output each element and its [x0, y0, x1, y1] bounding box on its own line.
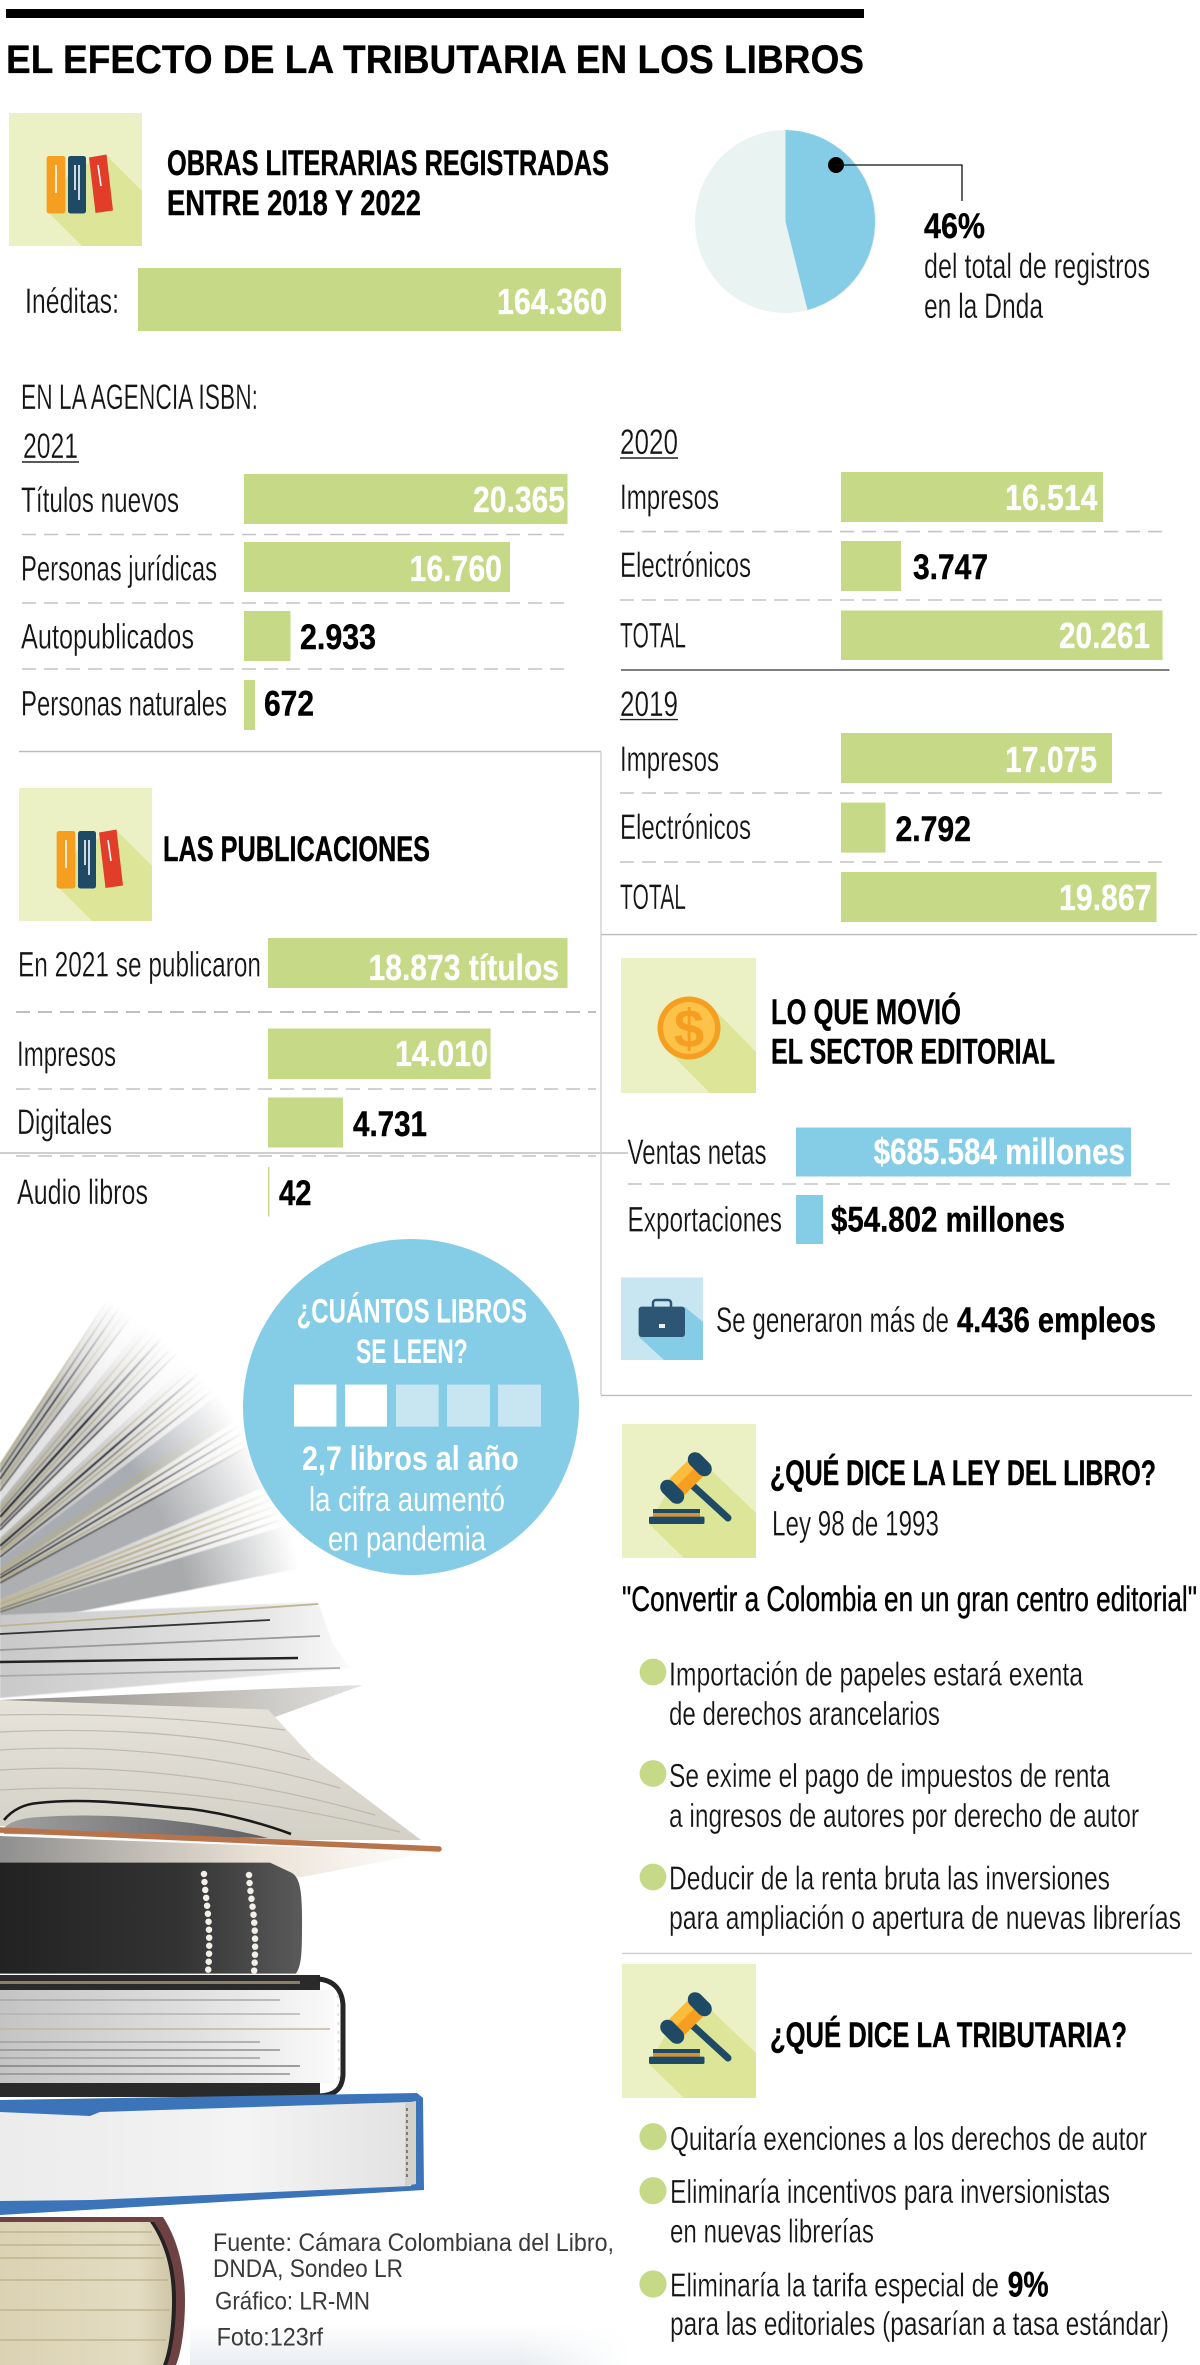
year 2019: 2019 [620, 685, 678, 724]
row: total 2019 [620, 872, 1156, 922]
source credits: Gráfico: LR-MN [215, 2288, 370, 2316]
panel: qué dice la ley del libro [622, 1424, 1197, 1936]
bullet: tarifa especial: Eliminaría la tarifa especial de [670, 2267, 999, 2304]
bullet: incentivos: en nuevas librerías [670, 2213, 874, 2250]
row: electrónicos 2020: 3.747 [913, 548, 988, 587]
row: ventas netas: $685.584 millones [874, 1131, 1125, 1172]
bullet: importación de papeles [640, 1656, 1083, 1732]
row: audio libros [17, 1167, 312, 1216]
row: digitales [17, 1098, 427, 1148]
heading: obras literarias [167, 144, 609, 223]
bullet: impuestos de renta [640, 1757, 1139, 1834]
panel: 2019 [620, 685, 1166, 922]
callout: cuántos libros se leen: 2,7 libros al año [302, 1440, 519, 1478]
callout: cuántos libros se leen: ¿CUÁNTOS LIBROS [297, 1292, 527, 1330]
icon: books [19, 788, 152, 921]
bullet: tarifa especial: 9% [1008, 2266, 1049, 2305]
row: personas jurídicas: Personas jurídicas [21, 550, 217, 588]
heading: las publicaciones: LAS PUBLICACIONES [163, 830, 430, 869]
icon: books [9, 113, 142, 246]
source credits: Foto:123rf [217, 2324, 323, 2352]
row: impresos: Impresos [17, 1035, 116, 1074]
row: electrónicos 2020 [620, 541, 988, 591]
row: títulos nuevos: 20.365 [473, 479, 565, 520]
row: audio libros: Audio libros [17, 1173, 148, 1212]
title: EL EFECTO DE LA TRIBUTARIA EN LOS LIBROS [6, 38, 864, 82]
row: impresos 2020: Impresos [620, 478, 719, 517]
row: electrónicos 2019: Electrónicos [620, 808, 751, 847]
row: exportaciones: $54.802 millones [831, 1201, 1065, 1240]
photo: stack of books [0, 1290, 630, 2365]
row: total 2020: 20.261 [1059, 615, 1150, 656]
pictogram: five squares [294, 1385, 541, 1427]
source credits: Fuente: Cámara Colombiana del Libro, [213, 2229, 614, 2257]
bullet: incentivos [639, 2173, 1110, 2250]
source credits: DNDA, Sondeo LR [213, 2255, 403, 2283]
year 2020: 2020 [620, 423, 678, 462]
label: inéditas: Inéditas: [25, 282, 119, 321]
callout: cuántos libros se leen: en pandemia [328, 1521, 486, 1559]
row: total 2020 [620, 610, 1163, 660]
row: total 2019: TOTAL [620, 878, 686, 917]
heading: lo que movió: EL SECTOR EDITORIAL [771, 1033, 1055, 1072]
row: electrónicos 2019 [620, 803, 971, 853]
row: exportaciones: Exportaciones [628, 1201, 782, 1240]
row: en 2021 se publicaron: 18.873 títulos [368, 947, 559, 988]
row: impresos 2019 [620, 733, 1112, 783]
row: autopublicados: 2.933 [300, 618, 376, 657]
callout: cuántos libros se leen: SE LEEN? [356, 1333, 468, 1371]
callout: 46% del total [924, 207, 1150, 326]
callout: 46% del total: 46% [924, 207, 985, 246]
row: ventas netas: Ventas netas [628, 1133, 766, 1172]
heading: en la agencia ISBN: EN LA AGENCIA ISBN: [21, 378, 258, 417]
heading: lo que movió [771, 992, 1055, 1072]
panel: obras literarias registradas [9, 113, 621, 331]
row: audio libros: 42 [279, 1174, 312, 1213]
source credits [213, 2229, 614, 2352]
callout: 46% del total: en la Dnda [924, 287, 1043, 326]
pie chart: 46% [695, 130, 962, 313]
row: digitales: Digitales [17, 1103, 112, 1142]
row: ventas netas [628, 1128, 1131, 1176]
row: impresos: 14.010 [395, 1033, 488, 1074]
row: impresos [17, 1028, 491, 1079]
icon: gavel [622, 1964, 756, 2098]
bullet: deducir de la renta [640, 1860, 1181, 1936]
row: electrónicos 2019: 2.792 [896, 810, 971, 849]
heading: obras literarias: OBRAS LITERARIAS REGISTRADAS [167, 144, 609, 183]
subheading: ley 98: Ley 98 de 1993 [772, 1504, 939, 1544]
panel: 2020 [620, 423, 1166, 660]
year 2021: 2021 [23, 427, 78, 466]
row: electrónicos 2020: Electrónicos [620, 546, 751, 585]
row: digitales: 4.731 [353, 1105, 427, 1144]
icon: gavel [622, 1424, 756, 1558]
icon: briefcase [621, 1278, 703, 1360]
bar: inéditas 164.360 [138, 268, 621, 331]
row: autopublicados: Autopublicados [21, 618, 194, 656]
row: exportaciones [628, 1195, 1065, 1244]
bar: inéditas 164.360: 164.360 [497, 281, 607, 322]
panel: qué dice la tributaria [622, 1964, 1169, 2342]
callout: empleos: Se generaron más de [716, 1301, 949, 1340]
row: total 2020: TOTAL [620, 616, 686, 656]
bullet: tarifa especial [639, 2266, 1169, 2342]
callout: cuántos libros se leen [243, 1239, 579, 1575]
panel: las publicaciones [16, 788, 596, 1216]
callout: empleos: 4.436 empleos [957, 1301, 1156, 1340]
row: en 2021 se publicaron [18, 938, 568, 988]
icon: coin [621, 958, 756, 1093]
heading: obras literarias: ENTRE 2018 Y 2022 [167, 184, 421, 223]
row: total 2019: 19.867 [1059, 877, 1152, 918]
heading: lo que movió: LO QUE MOVIÓ [771, 992, 961, 1032]
callout: cuántos libros se leen: la cifra aumentó [309, 1481, 505, 1519]
row: personas naturales: Personas naturales [21, 684, 227, 724]
row: autopublicados [21, 611, 376, 661]
row: impresos 2020: 16.514 [1005, 477, 1098, 518]
panel: lo que movió el sector editorial [621, 958, 1174, 1360]
bullet: importación de papeles: de derechos arancelarios [669, 1695, 940, 1732]
top rule [6, 9, 864, 18]
row: personas naturales: 672 [264, 684, 314, 724]
icon: coin: $ [674, 999, 704, 1059]
row: en 2021 se publicaron: En 2021 se publicaron [18, 946, 261, 984]
row: títulos nuevos [21, 474, 568, 524]
row: títulos nuevos: Títulos nuevos [21, 481, 179, 520]
row: impresos 2019: Impresos [620, 740, 719, 779]
row: personas jurídicas [21, 542, 510, 592]
row: impresos 2020 [620, 472, 1103, 522]
row: impresos 2019: 17.075 [1005, 739, 1097, 780]
panel: 2021 [21, 427, 568, 730]
row: personas jurídicas: 16.760 [410, 548, 502, 589]
